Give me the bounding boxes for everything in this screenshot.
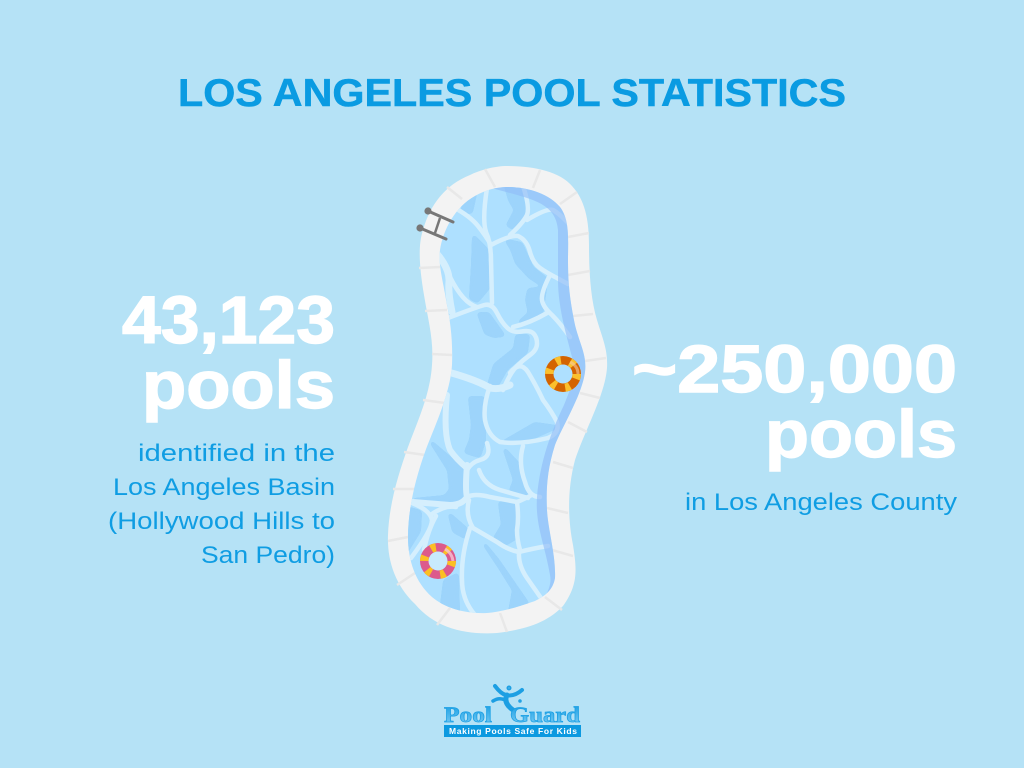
icon: water splash [493,686,522,710]
deck tile joints [388,169,606,632]
ladder [416,207,453,239]
tagline: Making Pools Safe For Kids [449,726,577,736]
unit: pools: pools [142,348,335,423]
description: basin: Los Angeles Basin [113,474,335,501]
panel: right statistic [632,332,957,516]
icon: orange swim ring [545,356,581,392]
pool deck [388,166,607,633]
title: LOS ANGELES POOL STATISTICS [178,72,846,115]
number: 43,123: 43,123 [122,283,335,358]
unit: pools: pools [765,397,957,472]
logo: Pool Guard: Guard [510,702,580,727]
description: basin: identified in the [138,440,335,467]
description: basin [108,440,335,569]
description: basin: (Hollywood Hills to [108,508,335,535]
illustration: swimming pool [388,166,607,633]
logo: Pool Guard [444,686,581,737]
description: county: in Los Angeles County [685,489,957,516]
number: ~250,000: ~250,000 [632,332,957,407]
shaded water edge [494,187,586,593]
description: basin: San Pedro) [201,542,335,569]
wordmark: Pool [444,702,492,727]
tagline bar [444,725,581,737]
water [408,187,586,614]
panel: left statistic [108,283,335,569]
icon: pink swim ring [420,543,456,579]
